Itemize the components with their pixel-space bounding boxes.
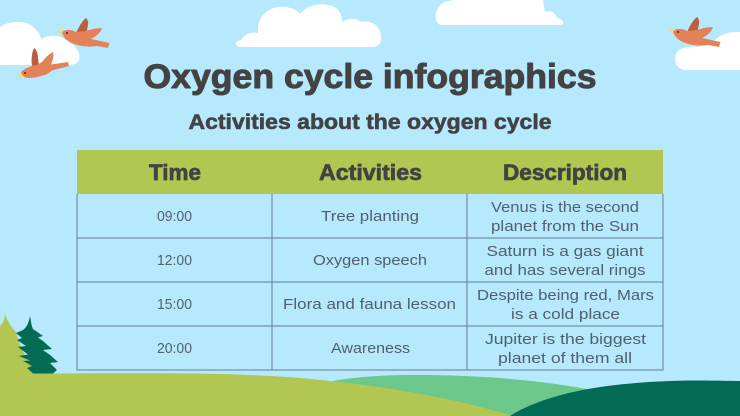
row: 12:00 (157, 244, 646, 279)
row: 15:00: is a cold place (511, 307, 620, 323)
row: 12:00: Oxygen speech (313, 253, 427, 269)
bird: upper left (56, 18, 110, 48)
row: 20:00: Jupiter is the biggest (485, 332, 646, 348)
row: 09:00: planet from the Sun (491, 219, 639, 235)
row: 15:00: 15:00 (157, 297, 192, 313)
row: 12:00: Saturn is a gas giant (486, 244, 644, 260)
cloud: right (675, 32, 740, 70)
hill: mid green (333, 375, 592, 416)
row: 12:00: and has several rings (484, 263, 646, 279)
table header (77, 150, 663, 194)
hill: yellow green (0, 313, 512, 416)
table grid (77, 194, 663, 370)
icon: pine tree (16, 316, 58, 374)
row: 12:00: 12:00 (157, 253, 192, 269)
subtitle: Activities about the oxygen cycle (188, 111, 552, 134)
table (77, 150, 663, 370)
hill: dark green (510, 380, 740, 416)
row: 20:00: 20:00 (157, 341, 192, 357)
row: 09:00 (157, 200, 639, 235)
cloud: top centre (236, 4, 381, 47)
bird: lower left (16, 48, 69, 78)
row: 15:00 (157, 288, 654, 323)
row: 15:00: Flora and fauna lesson (283, 297, 456, 313)
title: Oxygen cycle infographics (144, 58, 596, 96)
table header: Time (149, 160, 201, 185)
row: 09:00: Venus is the second (491, 200, 639, 216)
bird: upper right (668, 17, 720, 47)
row: 20:00: Awareness (331, 341, 410, 357)
cloud: top left (0, 22, 80, 65)
cloud: top right centre (436, 0, 563, 25)
row: 15:00: Despite being red, Mars (477, 288, 654, 304)
table header: Description (503, 160, 627, 185)
row: 09:00: Tree planting (321, 209, 419, 225)
table header: Activities (319, 160, 422, 185)
row: 20:00: planet of them all (498, 351, 632, 367)
row: 20:00 (157, 332, 646, 367)
row: 09:00: 09:00 (157, 209, 192, 225)
